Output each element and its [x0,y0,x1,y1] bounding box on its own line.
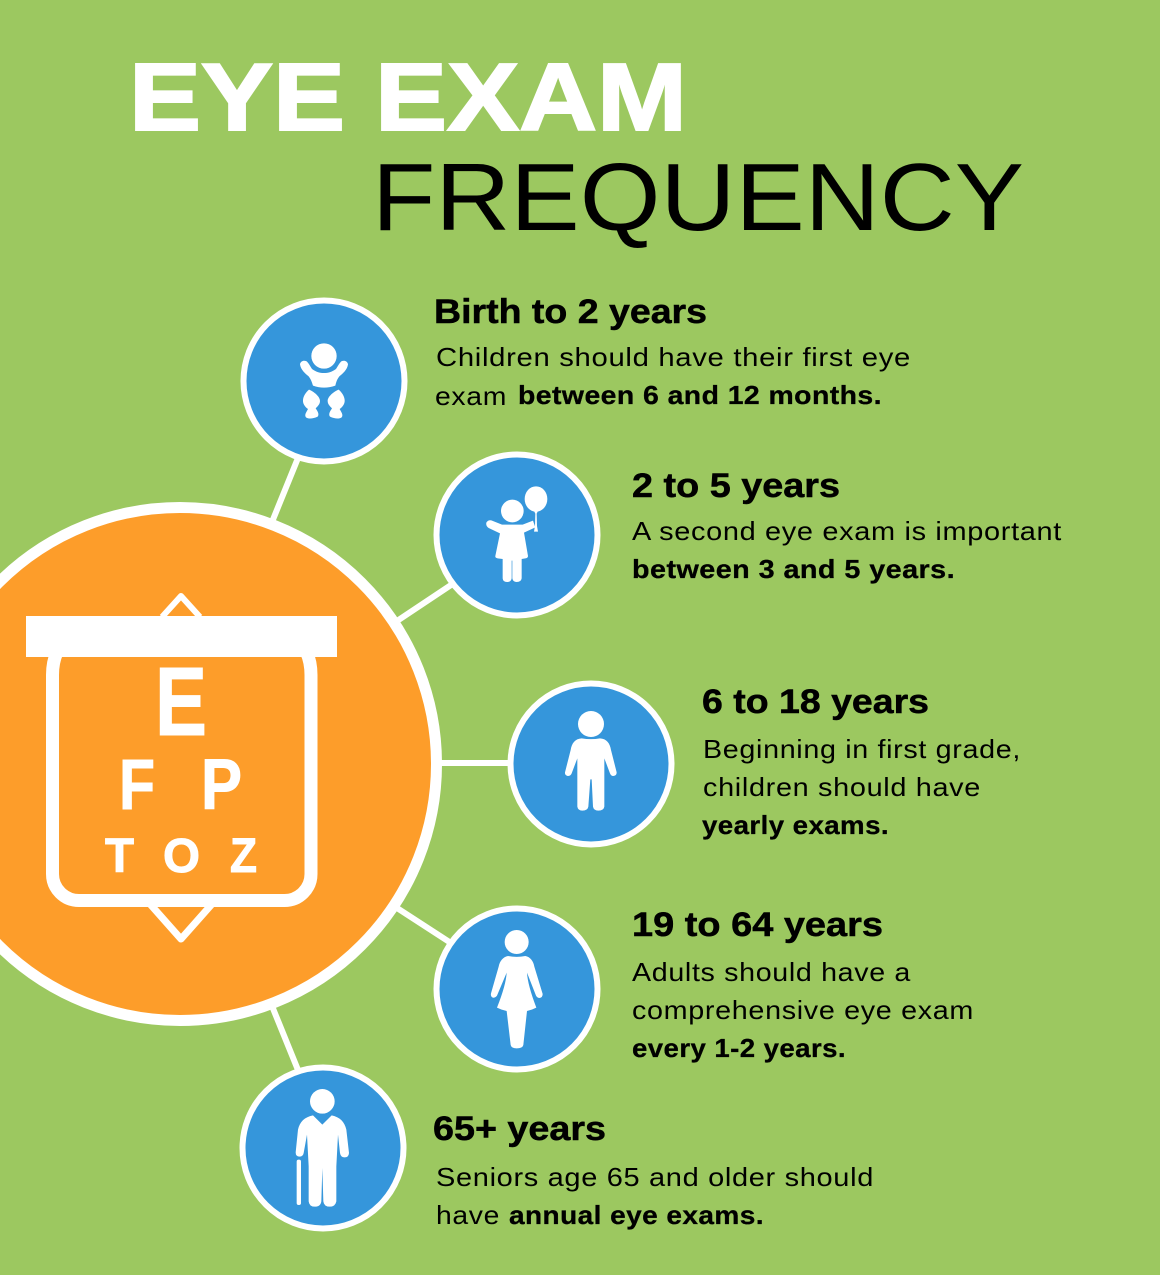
icon: senior with cane [296,1089,349,1207]
text: 6 to 18 years: children should have [703,772,981,802]
text: 6 to 18 years: 6 to 18 years [702,683,929,721]
icon: eye chart: O [163,830,200,883]
panel: eye chart circle [0,508,436,1020]
text: birth to 2 years: Birth to 2 years [434,293,707,331]
text: 19 to 64 years: every 1-2 years. [632,1033,846,1063]
text: 6 to 18 years [702,683,1021,840]
panel: 65+ years circle [242,1068,404,1228]
icon: adult woman [491,930,543,1048]
text: 65+ years: have [436,1200,500,1230]
text: 2 to 5 years [632,467,1062,584]
text: 65+ years: annual eye exams. [509,1200,764,1230]
icon: eye chart: F [119,746,155,825]
panel: 2 to 5 years circle [436,454,598,616]
icon: eye chart [26,596,337,939]
text: 2 to 5 years: between 3 and 5 years. [632,554,955,584]
icon: eye chart: P [201,746,242,825]
title [129,44,1024,251]
text: 2 to 5 years: 2 to 5 years [632,467,840,505]
text: birth to 2 years: exam [435,381,507,411]
panel: 19 to 64 years circle [436,908,598,1070]
connector lines [272,458,512,1070]
text: 19 to 64 years: comprehensive eye exam [632,995,974,1025]
text: birth to 2 years: between 6 and 12 months. [518,380,882,410]
text: 65+ years: 65+ years [433,1110,606,1148]
text: birth to 2 years: Children should have their first eye [436,342,911,372]
icon: eye chart: E [155,647,207,756]
icon: baby [300,343,348,419]
icon: eye chart: Z [230,830,257,883]
text: 19 to 64 years: 19 to 64 years [632,906,883,944]
panel: birth to 2 years circle [244,300,404,462]
title: FREQUENCY [372,144,1024,251]
text: 6 to 18 years: Beginning in first grade, [703,734,1021,764]
panel: 6 to 18 years circle [510,684,672,844]
text: 65+ years: Seniors age 65 and older should [436,1162,874,1192]
icon: girl with balloon [486,486,547,582]
icon: eye chart: T [105,830,134,883]
text: 19 to 64 years [632,906,974,1063]
text: 65+ years [433,1110,874,1230]
text: 19 to 64 years: Adults should have a [632,957,911,987]
text: 6 to 18 years: yearly exams. [702,810,889,840]
text: 2 to 5 years: A second eye exam is important [632,516,1062,546]
title: EYE EXAM [129,44,687,151]
text: birth to 2 years [434,293,911,411]
icon: child [565,711,617,811]
